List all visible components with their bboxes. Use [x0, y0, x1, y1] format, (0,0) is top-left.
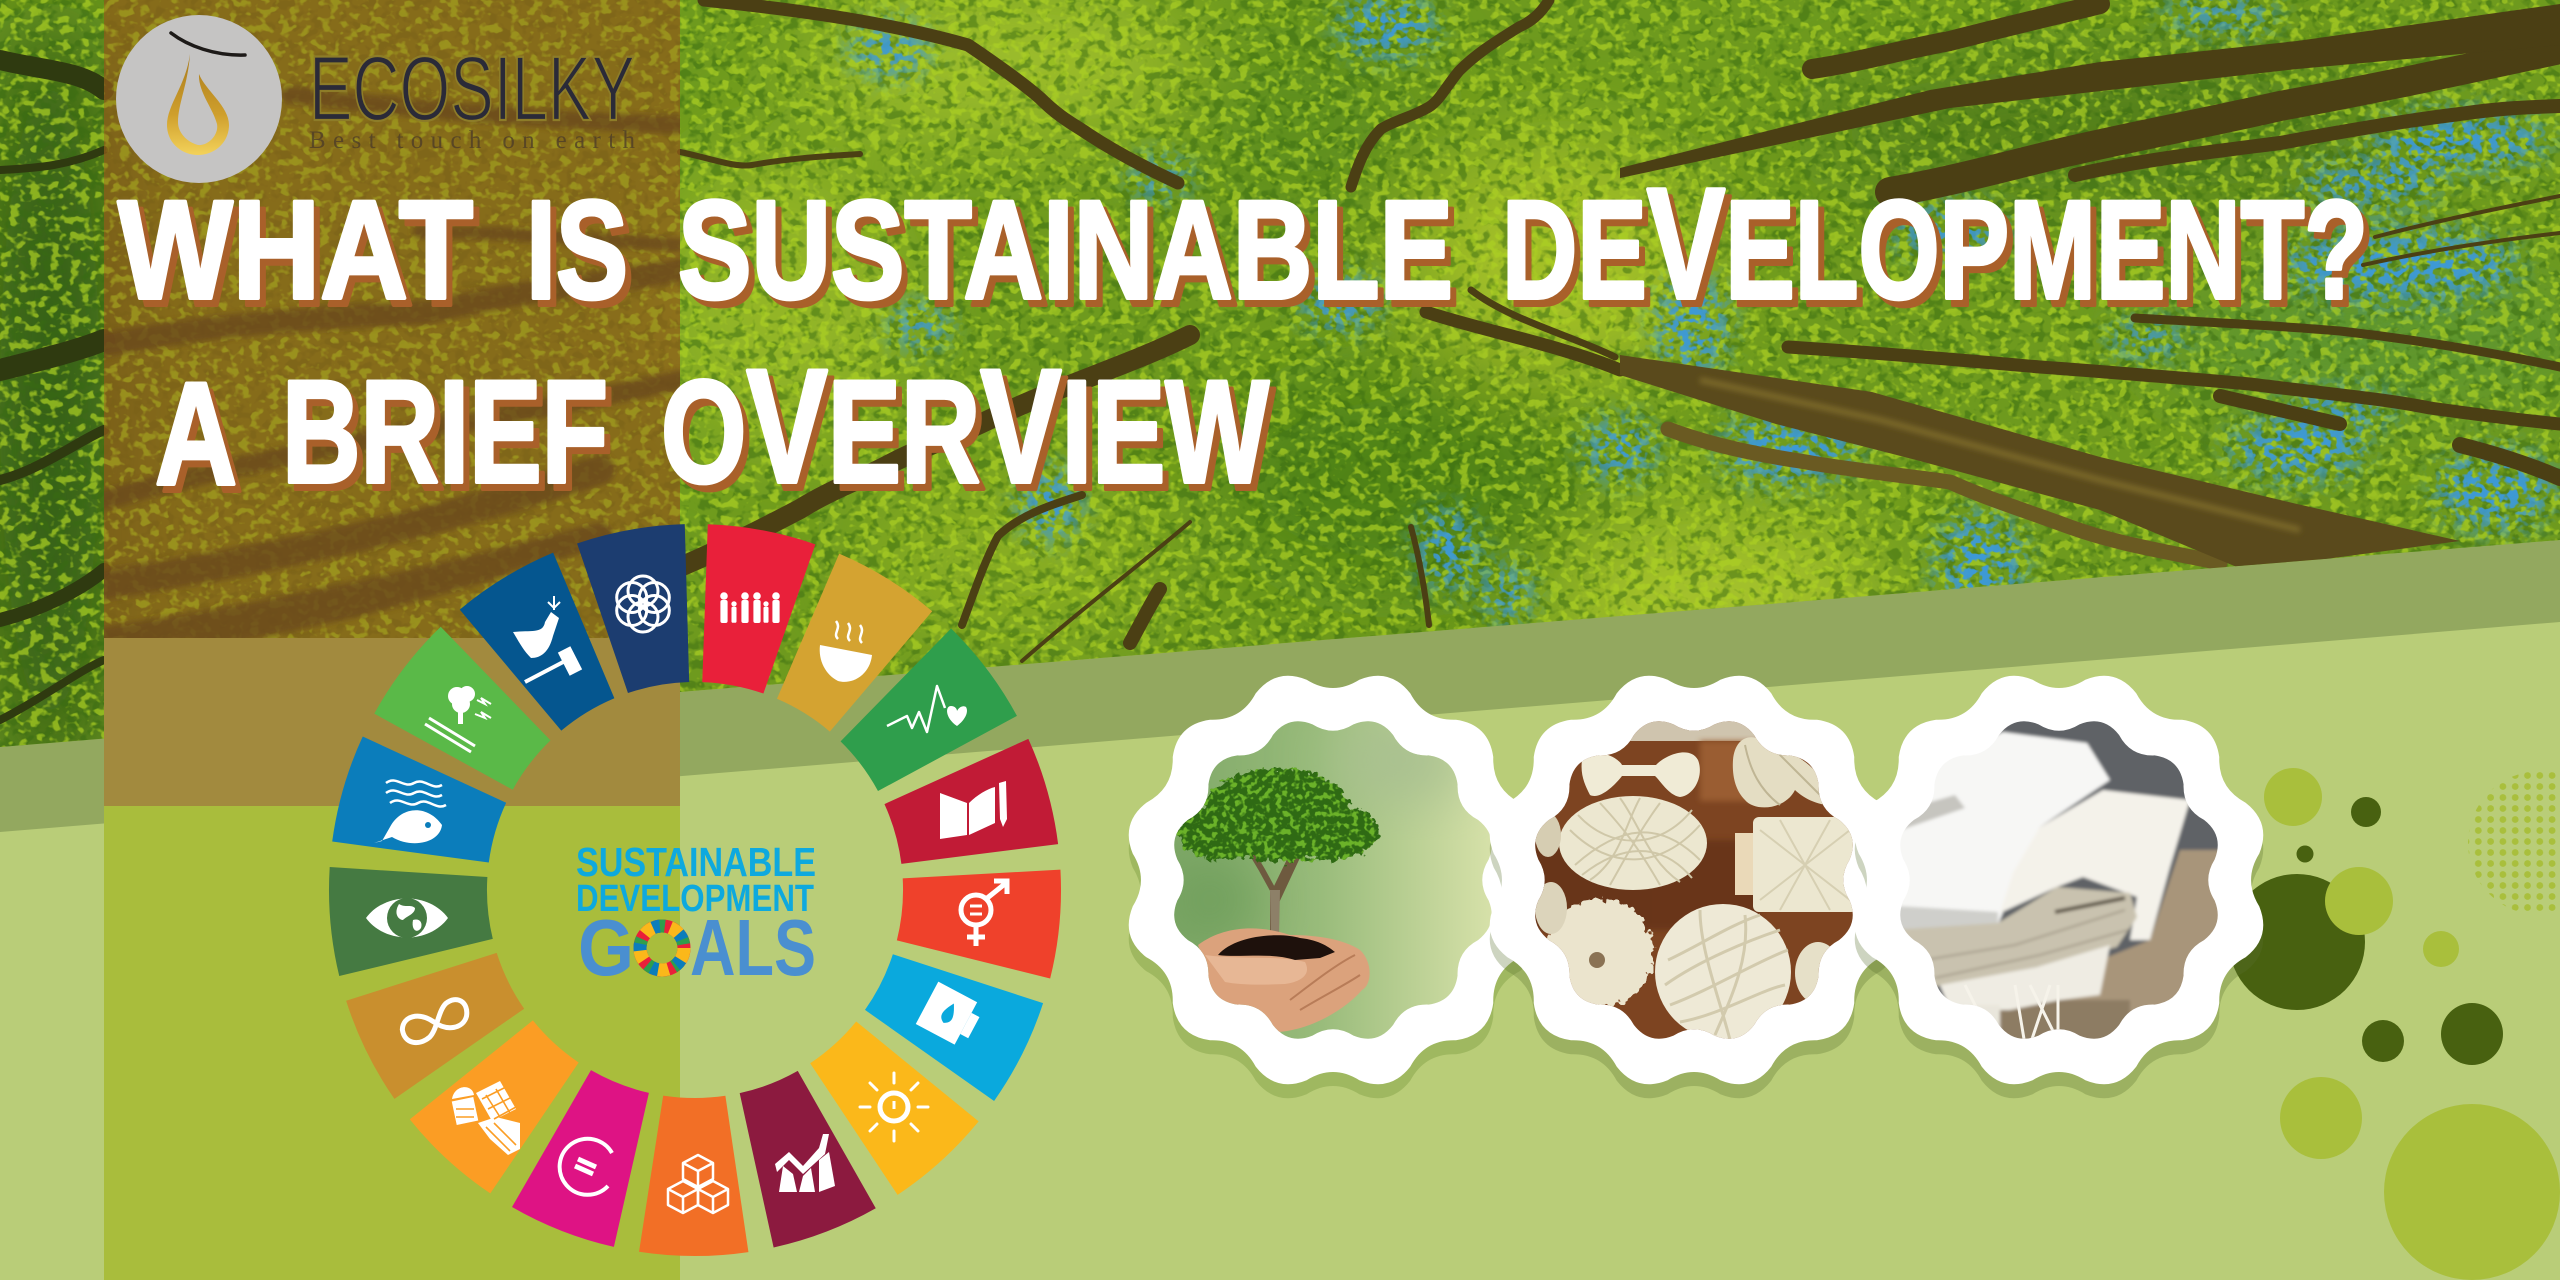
- title word: OVERVIEW: OVERVIEW: [661, 336, 1269, 517]
- wheel centre logo: Sustainable Development Goals: [576, 839, 816, 992]
- skein top right: [1733, 737, 1833, 807]
- title word: SUSTAINABLE: SUSTAINABLE: [678, 171, 1453, 328]
- logo wordmark: ECOSILKY: [309, 38, 635, 140]
- yarn ball left: [1559, 796, 1707, 890]
- paper cone spool: [1735, 833, 1753, 895]
- goal 10 wedge: reduced inequalities: [511, 1062, 671, 1251]
- mini SDG ring in the word Goals: [631, 917, 693, 979]
- goal 11 wedge: sustainable cities: [407, 1004, 596, 1196]
- tree trunk: [1252, 855, 1300, 930]
- goal 17 wedge: partnerships: [576, 520, 712, 697]
- goal 4 wedge: quality education: [878, 738, 1062, 887]
- goal 15 wedge: life on land: [371, 624, 565, 809]
- title: [118, 156, 2368, 517]
- title word: WHAT: WHAT: [118, 171, 473, 328]
- wheel centre logo: Sustainable Development Goals: ALS: [690, 903, 816, 992]
- goal 7 wedge: clean energy: [793, 1006, 981, 1198]
- goal 3 wedge: good health: [826, 626, 1020, 810]
- branches: [680, 0, 2560, 661]
- goal 14 wedge: life below water: [328, 735, 513, 885]
- decorative circles: [2229, 768, 2560, 1280]
- photo frame 2: natural yarn: [1490, 676, 1898, 1098]
- wheel centre logo: Sustainable Development Goals: G: [578, 903, 634, 992]
- goal 5 wedge: gender equality: [895, 855, 1065, 979]
- goal 6 wedge: clean water: [854, 933, 1047, 1103]
- SDG wheel: [326, 520, 1065, 1256]
- logo tagline: Best touch on earth: [309, 127, 636, 154]
- title word: A: A: [155, 352, 237, 515]
- goal 9 wedge: industry and innovation: [639, 1096, 749, 1256]
- fringe: [1940, 945, 2110, 1010]
- brand panel: tinted photo column: [104, 0, 680, 1280]
- fluffy yarn ring: [1546, 899, 1654, 1007]
- photo frame 3: folded fabrics: [1855, 676, 2263, 1098]
- soil: [1218, 935, 1335, 960]
- title word: BRIEF: BRIEF: [282, 350, 608, 513]
- goal 2 wedge: zero hunger: [757, 550, 934, 744]
- goal 13 wedge: climate action: [326, 853, 495, 976]
- yarn bits: [1795, 942, 1830, 999]
- burlap base: [1960, 850, 2240, 1060]
- left strip branches: [0, 60, 104, 720]
- background: diagonal olive band: [0, 540, 2560, 832]
- wheel centre logo: Sustainable Development Goals: SUSTAINABLE: [576, 839, 816, 885]
- goal 1 wedge: no poverty: [679, 520, 816, 698]
- white towel: [1880, 732, 2110, 932]
- hands: [1198, 928, 1370, 1032]
- title word: DEVELOPMENT?: DEVELOPMENT?: [1502, 156, 2368, 332]
- skein bow: [1582, 752, 1700, 797]
- beige fold: [1890, 887, 2137, 987]
- wheel centre logo: Sustainable Development Goals: DEVELOPMENT: [576, 878, 814, 920]
- goal 16 wedge: peace and justice: [458, 549, 635, 743]
- yarn ball centre: [1655, 904, 1791, 1040]
- goal 12 wedge: responsible consumption: [342, 932, 535, 1101]
- cream towel: [2000, 790, 2190, 940]
- title word: IS: IS: [526, 171, 628, 328]
- forest canopy photo: [0, 0, 2560, 800]
- photo frame 1: tree in hands: [1129, 676, 1537, 1098]
- goal 8 wedge: decent work: [718, 1062, 877, 1251]
- tree crown: [1178, 768, 1378, 862]
- logo badge: [116, 15, 282, 183]
- logo: Ecosilky: [116, 15, 636, 183]
